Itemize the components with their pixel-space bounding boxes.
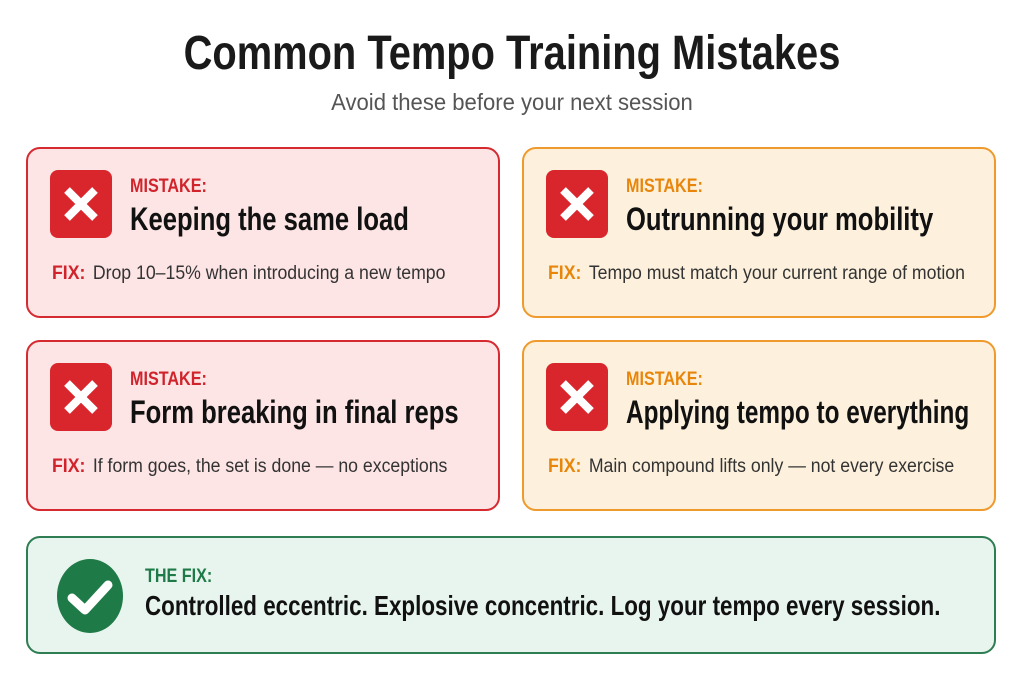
fix text: FIX: If form goes, the set is done — no exceptions <box>52 456 447 477</box>
icon: x <box>546 363 608 431</box>
label: MISTAKE: <box>626 369 703 390</box>
headline: Applying tempo to everything <box>626 394 969 430</box>
panel: mistake 3 <box>26 340 500 511</box>
label: MISTAKE: <box>130 176 207 197</box>
headline: Outrunning your mobility <box>626 201 933 237</box>
headline: Keeping the same load <box>130 201 409 237</box>
fix text: FIX: Main compound lifts only — not every exercise <box>548 456 954 477</box>
panel: the fix <box>26 536 996 654</box>
fix text: FIX: Drop 10–15% when introducing a new tempo <box>52 263 445 284</box>
label: THE FIX: <box>145 566 212 587</box>
panel: mistake 1 <box>26 147 500 318</box>
panel: mistake 2 <box>522 147 996 318</box>
fix text: FIX: Tempo must match your current range of motion <box>548 263 965 284</box>
icon: x <box>50 363 112 431</box>
label: MISTAKE: <box>626 176 703 197</box>
panel: mistake 4 <box>522 340 996 511</box>
headline: Form breaking in final reps <box>130 394 459 430</box>
label: MISTAKE: <box>130 369 207 390</box>
title: Common Tempo Training Mistakes <box>184 27 840 80</box>
subtitle: Avoid these before your next session <box>331 89 693 115</box>
icon: x <box>50 170 112 238</box>
icon: check <box>57 559 123 633</box>
icon: x <box>546 170 608 238</box>
fix statement: Controlled eccentric. Explosive concentric. Log your tempo every session. <box>145 590 940 621</box>
